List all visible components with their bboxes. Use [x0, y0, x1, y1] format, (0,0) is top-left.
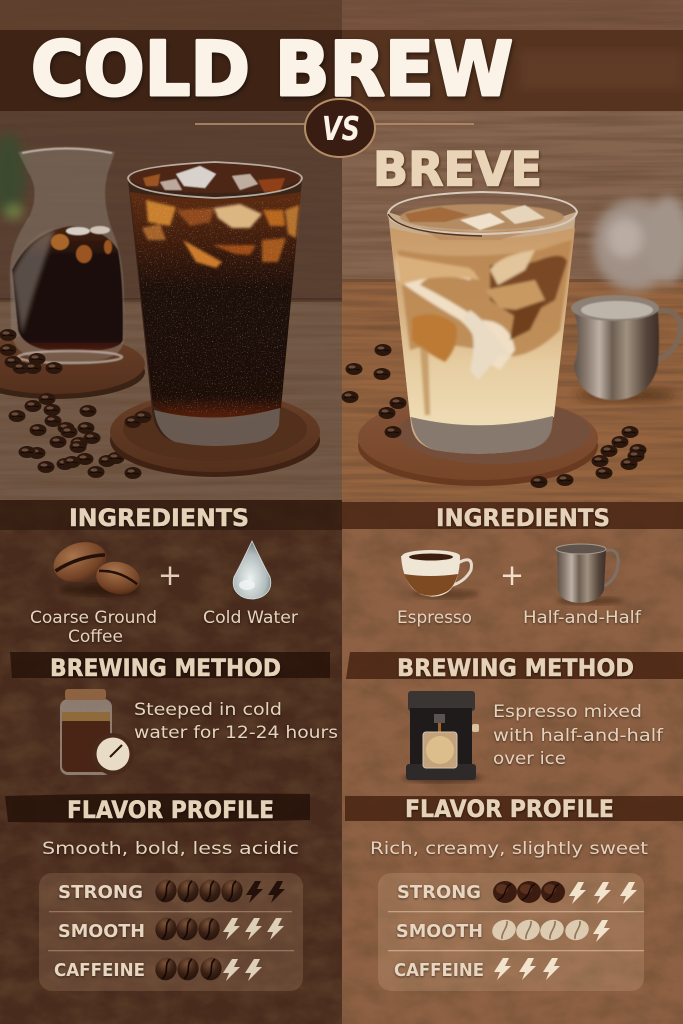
- flavor text right: Rich, creamy, slightly sweet: [370, 839, 648, 859]
- amber ice: [142, 200, 299, 268]
- carafe scene: [0, 147, 145, 399]
- dark coffee: [130, 192, 301, 424]
- glass base: [154, 408, 280, 446]
- vs rule line right: [374, 123, 474, 125]
- vs badge: [305, 99, 375, 157]
- row strong: STRONG: [397, 882, 481, 903]
- label: coarse ground coffee: [30, 608, 157, 647]
- vs badge: VS: [322, 109, 360, 148]
- plus right: +: [500, 558, 524, 592]
- label: cold water: Cold Water: [203, 608, 298, 628]
- background: right wood: [342, 0, 683, 500]
- milk pitcher: [571, 295, 680, 403]
- method text right: [493, 702, 664, 769]
- row strong: STRONG: [58, 882, 143, 903]
- right panel background: [342, 500, 683, 1024]
- carafe: [10, 147, 124, 363]
- right ingredients heading: INGREDIENTS: [436, 504, 610, 532]
- glass rim: [388, 192, 577, 234]
- blurred ice bag: [593, 196, 683, 291]
- condensation: [130, 195, 302, 425]
- left flavor heading: FLAVOR PROFILE: [67, 796, 274, 824]
- row caffeine: [394, 958, 560, 981]
- label: coarse ground coffee: Coffee: [68, 627, 123, 647]
- row strong: [397, 881, 637, 904]
- row caffeine: CAFFEINE: [54, 960, 145, 981]
- carafe coaster: [0, 334, 145, 399]
- label: half-and-half: Half-and-Half: [523, 608, 642, 628]
- icon: coffee beans: [48, 536, 143, 598]
- row caffeine: [54, 955, 262, 983]
- glass rim: [128, 162, 302, 198]
- ice on top: [130, 163, 300, 193]
- background: left wood: [0, 0, 342, 500]
- title band: [0, 30, 683, 111]
- breve glass: [388, 192, 577, 454]
- plus left: +: [158, 558, 182, 592]
- glass base: [411, 416, 553, 454]
- foam top: [400, 204, 564, 240]
- label: coarse ground coffee: Coarse Ground: [30, 608, 157, 628]
- panel mottled texture: [0, 500, 683, 1024]
- row smooth: SMOOTH: [396, 921, 483, 942]
- milk body: [390, 228, 575, 426]
- icon: jar and clock: [60, 689, 134, 775]
- row smooth: [396, 916, 610, 944]
- vs rule line left: [195, 123, 307, 125]
- method text left: Steeped in cold: [134, 700, 282, 720]
- left panel background: [0, 500, 342, 1024]
- left ingredients heading: [0, 500, 342, 532]
- flavor text left: Smooth, bold, less acidic: [42, 839, 299, 859]
- title: Breve: BREVE: [373, 142, 542, 198]
- row caffeine: CAFFEINE: [394, 960, 484, 981]
- espresso swirl: [395, 240, 572, 415]
- icon: espresso machine: [402, 691, 482, 783]
- left ingredients heading: INGREDIENTS: [69, 504, 249, 532]
- scattered beans right: [342, 344, 646, 488]
- row smooth: [58, 915, 284, 943]
- cold brew glass: [128, 162, 302, 446]
- icon: espresso cup: [401, 550, 479, 599]
- right ratings table: [378, 873, 644, 991]
- right flavor heading: [345, 795, 683, 823]
- method text left: [134, 700, 338, 743]
- right brewing heading: BREWING METHOD: [397, 654, 634, 682]
- left flavor heading: [5, 793, 310, 824]
- left brewing heading: BREWING METHOD: [50, 654, 281, 682]
- left ratings table: [39, 873, 303, 991]
- icon: water drop: [233, 541, 271, 599]
- beans on carafe coaster: [0, 329, 62, 374]
- row smooth: SMOOTH: [58, 921, 145, 942]
- left coaster: [110, 392, 320, 477]
- method text right: Espresso mixed: [493, 702, 642, 722]
- method text left: water for 12-24 hours: [134, 723, 338, 743]
- right coaster: [358, 396, 598, 486]
- method text right: with half-and-half: [493, 726, 664, 746]
- right flavor heading: FLAVOR PROFILE: [405, 795, 614, 823]
- right ingredients heading: [342, 502, 683, 532]
- scattered beans left: [8, 393, 142, 479]
- row strong: [58, 877, 285, 905]
- wood grain texture: [0, 0, 683, 500]
- title: Cold Brew: COLD BREW: [31, 25, 513, 113]
- label: espresso: Espresso: [397, 608, 472, 628]
- icon: metal creamer: [556, 544, 624, 605]
- blurred greenery behind carafe: [0, 133, 26, 219]
- method text right: over ice: [493, 749, 566, 769]
